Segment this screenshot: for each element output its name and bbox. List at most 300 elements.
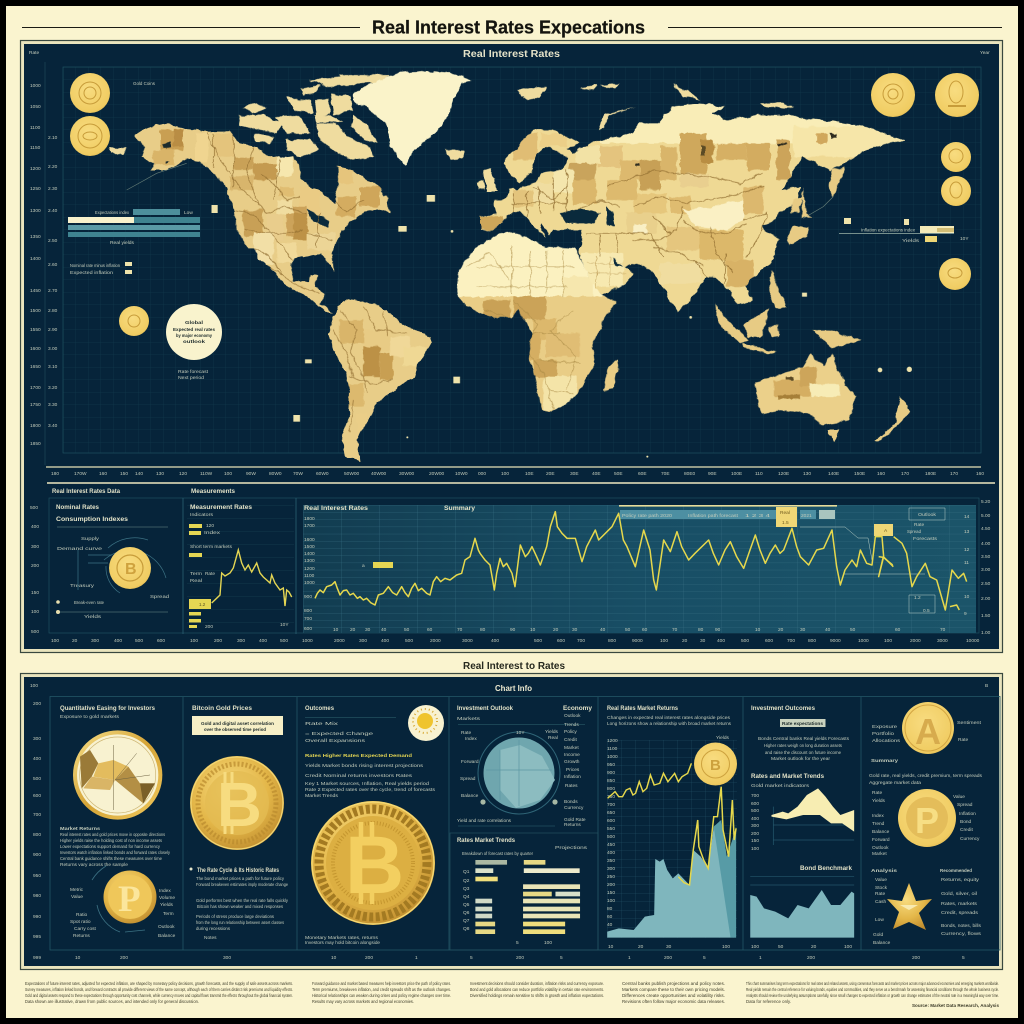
axis: left: 995: [33, 934, 41, 940]
chart: main real rates line: 70: [457, 627, 463, 633]
axis: dashboard bottom: 500: [280, 638, 288, 644]
chart: main real rates line: A: [884, 528, 888, 534]
land: Arctic islands: [110, 75, 793, 192]
chart: area: 800: [607, 786, 615, 792]
callout: cream circle: Rate forecast: [178, 369, 209, 375]
chart: pale area: 500: [751, 808, 759, 814]
section: coins and star: Sentiment: [957, 720, 982, 726]
bar legend: left: [68, 81, 200, 276]
chart: globe: [478, 732, 560, 814]
section: coins and star: Outlook: [872, 845, 889, 851]
footer block 5: Data for reference only.: [746, 999, 791, 1004]
axis: map left: 2.90: [48, 327, 58, 333]
coin: P: P: [118, 879, 141, 920]
section: globe and bars: Market: [564, 745, 579, 751]
section: pie and coin: Volume: [159, 895, 175, 901]
text block: Rate Mix: [305, 721, 339, 727]
axis: dashboard bottom: 2000: [334, 638, 345, 644]
text: section one: Spread: [150, 594, 169, 600]
chart: main real rates line: Forecasts: [913, 536, 938, 542]
section: pie and coin: Term: [163, 911, 174, 917]
heading: chart: Real Interest Rates: [304, 505, 369, 512]
chart: main real rates line: 30: [572, 627, 578, 633]
axis: left: 500: [33, 776, 41, 782]
chart: area: 350: [607, 858, 615, 864]
axis: map left: 1350: [30, 234, 41, 240]
chart: main real rates line: 10: [333, 627, 339, 633]
section: coins and star: Market: [872, 851, 887, 857]
section: bitcoin coin: [190, 705, 289, 941]
chart: main real rates line: 90: [715, 627, 721, 633]
ocean markers: [212, 195, 912, 458]
section: coins and star: Value: [953, 794, 965, 800]
bar chart: 5: [516, 940, 519, 946]
axis: left: 200: [33, 701, 41, 707]
axis: dashboard right: 2.00: [981, 596, 991, 602]
axis: map left: 3.40: [48, 423, 58, 429]
axis: map bottom: 140: [135, 471, 143, 477]
text block: Key 1 Market sources, Inflation, Real yields period: [305, 781, 429, 787]
chart: area: 100: [722, 944, 730, 950]
text block: [305, 718, 436, 799]
coin: bitcoin medium: [190, 756, 284, 850]
chart: small line: 120: [206, 523, 214, 529]
axis: left: 100: [30, 683, 38, 689]
axis: map bottom: 100: [501, 471, 509, 477]
chart: main real rates line: 1300: [304, 558, 315, 564]
chart: area: 10: [608, 944, 614, 950]
chart: pale area: 150: [751, 838, 759, 844]
section: area and line chart: Yields: [716, 735, 729, 741]
section: coins and star: Value: [875, 877, 887, 883]
land: North America: [134, 123, 391, 314]
axis: dashboard bottom: 3000: [937, 638, 948, 644]
chart: main real rates line: a: [362, 564, 365, 569]
axis: map left: 2.80: [48, 308, 58, 314]
section: bitcoin coin: over the observed time period: [204, 727, 266, 732]
axis: map left: Year: [980, 50, 990, 56]
coin: A: A: [915, 711, 941, 752]
land: Madagascar: [604, 358, 619, 390]
axis: left: 990: [33, 914, 41, 920]
section: globe and bars: Currency: [564, 805, 584, 811]
callout: chart tag left: [373, 562, 393, 568]
callout: cream box: [192, 716, 283, 735]
chart: main real rates line: 30: [365, 627, 371, 633]
bar chart: Q5: [463, 902, 470, 908]
axis: dashboard right: 3.50: [981, 554, 991, 560]
section: globe and bars: Rates: [565, 783, 578, 789]
axis: dashboard left: [30, 505, 39, 635]
coin: chart: B: [710, 757, 721, 774]
axis: bottom: 300: [223, 955, 231, 961]
bar legend: left: Expected inflation: [70, 270, 113, 276]
footer block 2: [312, 981, 451, 1004]
section: coins and star: Credit, spreads: [941, 910, 979, 916]
seas cut into Eurasia: [560, 207, 623, 267]
chart: area: 150: [607, 890, 615, 896]
text block: Central bank guidance shifts these measures over time: [60, 856, 162, 862]
chart: teal area: 50: [778, 944, 784, 950]
chart: main real rates line: 12: [964, 547, 970, 553]
axis: map left: 2.30: [48, 186, 58, 192]
axis: map bottom: 120: [179, 471, 187, 477]
chart: area: 60: [607, 914, 613, 920]
section: area and line chart: Long horizons show a relationship with broad market returns: [607, 721, 732, 727]
axis: dashboard left: 200: [31, 563, 39, 569]
bar legend: left: Gold Coins: [133, 81, 156, 87]
axis: map bottom: 110W: [200, 471, 213, 477]
axis: map left: Rate: [29, 50, 39, 56]
title: Real Interest Rates Expecations: [372, 16, 645, 38]
section: globe and bars: Breakdown of forecast rates by quarter: [462, 851, 533, 857]
section: coins and star: Returns, equity: [941, 877, 980, 883]
section: pie and coin: Balance: [158, 933, 176, 939]
heading: section two: Real Interest to Rates: [463, 661, 565, 672]
text block: = Expected Change: [305, 731, 374, 737]
section: small area charts: [750, 705, 854, 950]
axis: map bottom: 160: [99, 471, 107, 477]
section: coins and star: Index: [872, 813, 884, 819]
callout: cream circle: by major economy: [176, 333, 212, 338]
bar chart: Q3: [463, 886, 470, 892]
axis: left: 300: [33, 736, 41, 742]
axis: dashboard bottom: 300: [237, 638, 245, 644]
section: large coin: Investors may hold bitcoin alongside: [305, 940, 380, 946]
text block: Bitcoin has shown weaker and mixed responses: [197, 904, 284, 910]
section: globe and bars: Real: [548, 735, 558, 741]
footer block 1: Expectations of future interest rates, adjusted for expected inflation, are shaped by monetary policy decisions, growth forecasts, and the supply of safe assets across markets.: [25, 981, 293, 986]
text: section one: [56, 504, 169, 620]
axis: map left: 1250: [30, 186, 41, 192]
section: bitcoin coin: Gold and digital asset correlation: [201, 721, 274, 726]
section: coins and star: Gold, silver, oil: [941, 891, 977, 897]
coin: dashboard: B: [125, 561, 137, 578]
chart: main real rates line: 50: [404, 627, 410, 633]
axis: map bottom: 80E0: [684, 471, 696, 477]
axis: dashboard bottom: 400: [114, 638, 122, 644]
chart: main real rates line: 9: [964, 611, 967, 617]
chart: area: 20: [638, 944, 644, 950]
footer block 1: Gold and digital assets respond to these expectations through opportunity cost channels, while currency moves and capital flows transmit the effects throughout the global financial system.: [25, 993, 293, 998]
chart: small line: Short term markets: [190, 544, 233, 550]
bar chart: Q7: [463, 918, 470, 924]
axis: map left: 3.00: [48, 346, 58, 352]
chart: main real rates line: 10: [964, 594, 970, 600]
bar legend: right: [839, 218, 969, 244]
axis: map bottom: 100: [224, 471, 232, 477]
section: globe and bars: Rate: [461, 730, 471, 736]
map frame and grid: [45, 62, 981, 467]
axis: map bottom: 30W00: [399, 471, 415, 477]
footer block 5: Source: Market Data Research, Analysis: [912, 1003, 999, 1008]
section: large coin: Monetary Markets rates, returns: [305, 935, 379, 941]
footer block 5: [746, 981, 999, 1008]
section: coins and star: Inflation: [959, 811, 976, 817]
section: coins and star: Bonds, notes, bills: [941, 923, 982, 929]
section: small area charts: Investment Outcomes: [751, 705, 816, 712]
axis: map left: 1150: [30, 145, 41, 151]
text block: The bond market prices a path for future policy: [196, 876, 285, 882]
axis: dashboard bottom: 2000: [910, 638, 921, 644]
chart: area: 40: [607, 922, 613, 928]
section: globe and bars: Economy: [563, 705, 593, 712]
text block: Forward breakeven estimates imply moderate change: [196, 882, 288, 888]
text block: [60, 826, 170, 868]
chart: main real rates line: 20: [778, 627, 784, 633]
text block: [196, 867, 289, 941]
world map: [110, 71, 913, 463]
axis: map left: 1000: [30, 83, 41, 89]
chart: area: 1100: [607, 746, 618, 752]
text block: The Rate Cycle & Its Historic Rates: [197, 867, 279, 874]
heading: Quantitative Easing for Investors: [60, 705, 156, 712]
section: coins and star: Forward: [872, 837, 890, 843]
axis: bottom: 1: [759, 955, 762, 961]
axis: dashboard bottom: 300: [359, 638, 367, 644]
callout: cream circle: outlook: [183, 339, 206, 344]
chart: main real rates line: Inflation path forecast: [688, 513, 739, 519]
axis: map bottom: [51, 471, 984, 477]
chart: main real rates line: 1 2 3 4: [745, 513, 771, 519]
coin: right 3: [941, 142, 971, 172]
axis: map bottom: 40E: [592, 471, 601, 477]
chart: area: 1000: [607, 754, 618, 760]
section: globe and bars: Projections: [555, 845, 588, 851]
chart: area: 950: [607, 762, 615, 768]
axis: map left: 1800: [30, 423, 41, 429]
axis: map bottom: 70E: [661, 471, 670, 477]
axis: dashboard right: 4.00: [981, 541, 991, 547]
coin: left lower: [119, 306, 149, 336]
chart: main real rates line: 1.5: [782, 520, 789, 526]
section: coins and star: Trend: [872, 821, 885, 827]
chart: area: [607, 738, 737, 950]
section: coins and star: Stock: [875, 885, 888, 891]
section: globe and bars: Policy: [564, 729, 577, 735]
chart: pale area: 200: [751, 831, 759, 837]
axis: left: 700: [33, 812, 41, 818]
axis: map bottom: 60E: [638, 471, 647, 477]
chart: main real rates line: 1700: [304, 523, 315, 529]
axis: dashboard bottom: 20: [682, 638, 688, 644]
axis: map bottom: 10W0: [455, 471, 468, 477]
chart: area: 900: [607, 770, 615, 776]
icon: sun coin: [408, 705, 444, 741]
chart: main real rates line: [303, 505, 976, 633]
section: globe and bars: Markets: [457, 716, 481, 722]
section: coins and star: Low: [875, 917, 884, 923]
chart: teal area: [750, 877, 854, 950]
footer block 1: Survey measures, inflation linked bonds, and forward contracts all provide different views of the same concept, although each of them carries distinct risk premiums and liquidity effects.: [25, 987, 293, 992]
chart: area: 700: [607, 802, 615, 808]
section: area and line chart: Real Rates Market Returns: [607, 705, 679, 712]
section: globe and bars: Growth: [564, 759, 580, 765]
axis: left: [30, 683, 41, 961]
axis: map left: 2.70: [48, 288, 58, 294]
axis: dashboard bottom: 800: [608, 638, 616, 644]
bar chart: Q1: [463, 869, 470, 875]
coin: top right 2: [935, 73, 979, 117]
section: globe and bars: Credit: [564, 737, 577, 743]
section: globe and bars: Inflation: [564, 774, 581, 780]
section: large coin: [305, 705, 444, 946]
chart: main real rates line: Outlook: [918, 512, 937, 518]
section: bitcoin coin: Bitcoin Gold Prices: [192, 705, 253, 712]
axis: map bottom: 170: [901, 471, 909, 477]
callout: cream circle: Next period: [178, 375, 204, 381]
section: coins and star: Portfolio: [872, 731, 894, 737]
bar legend: left: Low: [184, 210, 193, 216]
chart: main real rates line: 1400: [304, 551, 315, 557]
text block: Market Trends: [305, 793, 339, 799]
section: coins and star: Balance: [872, 829, 890, 835]
chart: main real rates line: 13: [964, 529, 970, 535]
bar chart: Q4: [463, 894, 470, 900]
chart: small line: Indicators: [190, 512, 214, 518]
coin: right 5: [939, 258, 971, 290]
callout: box: [780, 719, 826, 727]
chart: main real rates line: 1200: [304, 566, 315, 572]
footer block 3: Investment decisions should consider duration, inflation risks and currency exposure.: [470, 981, 604, 986]
chart: main real rates line: 11: [964, 560, 969, 566]
axis: dashboard left: 150: [31, 590, 39, 596]
axis: bottom: 10: [331, 955, 337, 961]
chart: main real rates line: 80: [480, 627, 486, 633]
land: Australia: [754, 353, 856, 426]
axis: map bottom: 20W00: [429, 471, 445, 477]
chart: teal area: 20: [811, 944, 817, 950]
chart: main real rates line: 1500: [304, 544, 315, 550]
axis: bottom: 1: [628, 955, 631, 961]
panel: rate dashboard: [30, 488, 991, 644]
section: pie and coin: Spot ratio: [70, 919, 91, 925]
axis: map bottom: 90E: [708, 471, 717, 477]
axis: left: 600: [33, 793, 41, 799]
axis: dashboard bottom: 400: [381, 638, 389, 644]
axis: dashboard bottom: 9000: [830, 638, 841, 644]
section: globe and bars: Balance: [461, 793, 479, 799]
section: pie and coin: Outlook: [158, 924, 175, 930]
section: coins and star: Yields: [872, 798, 885, 804]
coin: chart: [694, 742, 737, 786]
section: globe and bars: Prices: [566, 767, 580, 773]
axis: map bottom: 140E: [828, 471, 839, 477]
footer block 4: Markets compare these to their own pricing models.: [622, 987, 725, 992]
axis: map left: 1450: [30, 288, 41, 294]
divider: [47, 482, 995, 484]
chart: main real rates line: 0.5: [923, 608, 930, 614]
axis: map bottom: 000: [478, 471, 486, 477]
chart: main real rates line: 20: [350, 627, 356, 633]
text block: Periods of stress produce large deviations: [196, 914, 275, 920]
chart: main real rates line: Rate: [914, 522, 924, 528]
axis: map bottom: 110: [755, 471, 763, 477]
chart: area: 650: [607, 810, 615, 816]
axis: left: 900: [33, 852, 41, 858]
axis: map left: 1850: [30, 441, 41, 447]
section: coins and star: Rate: [958, 737, 968, 743]
section: coins and star: Allocations: [872, 738, 901, 744]
axis: bottom: 200: [807, 955, 815, 961]
chart: main real rates line: 1000: [304, 580, 315, 586]
section: coins and star: [869, 702, 983, 946]
axis: dashboard right: 4.50: [981, 526, 991, 532]
section: coins and star: Rate: [875, 891, 885, 897]
text block: Lower expectations support demand for hard currency: [60, 844, 161, 850]
chart: small line: Term: [190, 571, 202, 577]
axis: dashboard bottom: 500: [135, 638, 143, 644]
chart: pale area: [751, 788, 854, 852]
chart: small line: 10Y: [280, 622, 289, 628]
text: section one: Demand curve: [57, 546, 102, 552]
land: Greenland: [353, 71, 473, 166]
axis: bottom: 5: [962, 955, 965, 961]
section: coins and star: Currency, flows: [941, 931, 982, 937]
pie chart: [73, 730, 162, 820]
chart: main real rates line: Spread: [907, 529, 921, 535]
bar legend: right: Yields: [902, 238, 920, 244]
chart: area: 1200: [607, 738, 618, 744]
panel: bitcoin and charts: [20, 674, 1002, 970]
axis: dashboard left: 500: [31, 629, 39, 635]
axis: map left: 1100: [30, 125, 41, 131]
axis: dashboard bottom: 300: [91, 638, 99, 644]
axis: dashboard bottom: 500: [741, 638, 749, 644]
chart: main real rates line: 1800: [304, 516, 315, 522]
chart: main real rates line: 40: [600, 627, 606, 633]
coins on the map: [70, 73, 979, 336]
chart: main real rates line: 2021: [801, 513, 812, 519]
chart: main real rates line: 40: [825, 627, 831, 633]
coin: top right 1: [871, 73, 915, 117]
section: globe and bars: [450, 705, 598, 950]
chart: main real rates line: 1600: [304, 537, 315, 543]
chart: area: 500: [607, 834, 615, 840]
section: large coin: Outcomes: [305, 705, 335, 712]
section: coins and star: Exposure: [872, 724, 897, 730]
chart: main real rates line: 50: [625, 627, 631, 633]
chart: main real rates line: 80: [698, 627, 704, 633]
text block: Higher yields raise the holding cost of non income assets: [60, 838, 162, 844]
axis: map bottom: 80W0: [269, 471, 282, 477]
chart: pale area: 600: [751, 801, 759, 807]
section: pie and coin: Returns: [73, 933, 90, 939]
text block: Yields Market bonds rising interest projections: [305, 763, 424, 769]
chart: main real rates line: 40: [381, 627, 387, 633]
chart: area: 400: [607, 850, 615, 856]
axis: dashboard bottom: 400: [259, 638, 267, 644]
axis: bottom: 200: [365, 955, 373, 961]
coin: bitcoin large: B: [345, 820, 404, 911]
footer block 2: Forward guidance and market based measures help investors price the path of policy rates.: [312, 981, 451, 986]
footer block 4: Revisions often follow major economic data releases.: [622, 999, 725, 1004]
section: globe and bars: Rates Market Trends: [457, 837, 516, 844]
axis: left: 800: [33, 832, 41, 838]
chart: small line: Real: [190, 578, 202, 584]
section: coins and star: Analysis: [871, 868, 897, 874]
section: coins and star: Gold: [873, 932, 883, 938]
callout: cream circle: Expected real rates: [173, 327, 215, 332]
section: pie and coin: [60, 705, 176, 939]
chart: main real rates line: 900: [304, 594, 312, 600]
footer block 1: Data shown are illustrative, drawn from public sources, and intended only for general discussion.: [25, 999, 199, 1004]
axis: left: 999: [33, 955, 41, 961]
axis: map bottom: 170W: [74, 471, 87, 477]
axis: map left: 3.20: [48, 385, 58, 391]
chart: area: 550: [607, 826, 615, 832]
axis: map left: 1050: [30, 104, 41, 110]
